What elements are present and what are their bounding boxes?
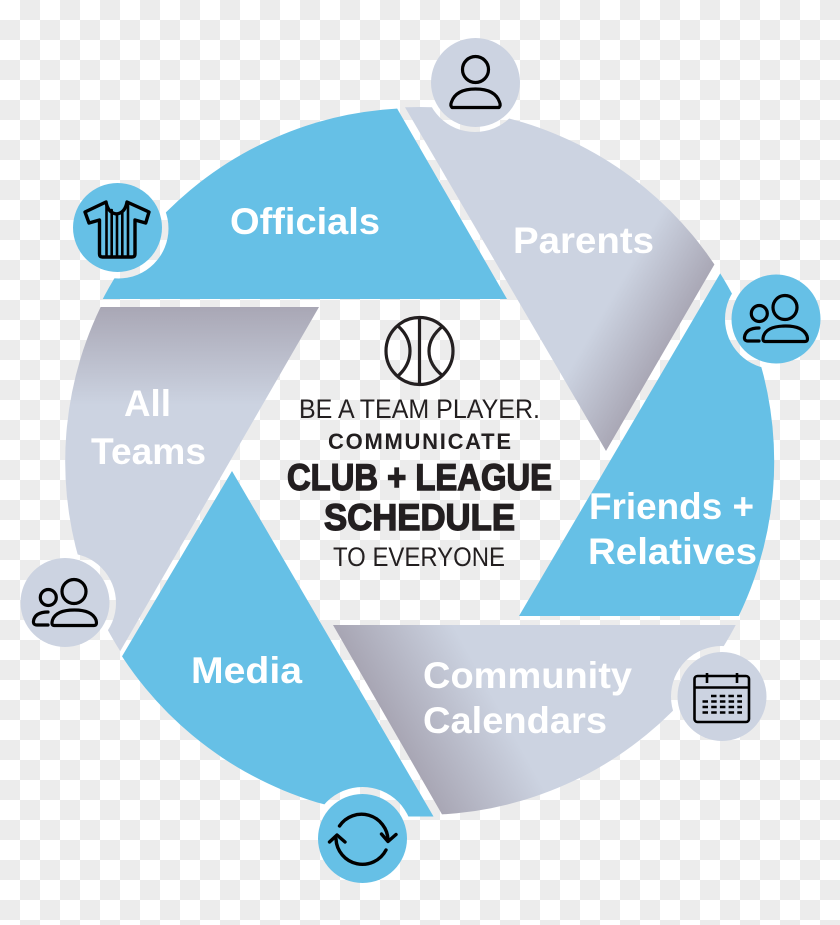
icon: referee jersey bbox=[73, 183, 162, 272]
panel: friends and relatives wedge bbox=[519, 273, 774, 616]
icon: basketball bbox=[386, 318, 453, 384]
icon: sync arrows bbox=[318, 794, 407, 883]
panel: all teams wedge bbox=[65, 307, 319, 651]
label: Friends + Relatives: Friends + bbox=[589, 486, 754, 527]
label: Friends + Relatives bbox=[588, 486, 757, 572]
label: Community Calendars: Calendars bbox=[423, 700, 607, 741]
icon: calendar bbox=[678, 652, 766, 741]
label: Community Calendars: Community bbox=[423, 655, 632, 696]
label: Media: Media bbox=[191, 650, 302, 691]
text: to everyone: TO EVERYONE bbox=[333, 542, 505, 572]
icon: all teams group bbox=[20, 558, 110, 647]
panel: parents wedge bbox=[405, 107, 714, 451]
text: communicate: COMMUNICATE bbox=[328, 429, 511, 454]
label: All Teams bbox=[91, 383, 206, 472]
label: Officials: Officials bbox=[230, 201, 380, 242]
label: Parents: Parents bbox=[513, 220, 654, 261]
icon: parent person bbox=[431, 38, 520, 127]
label: Community Calendars bbox=[423, 655, 632, 741]
label: All Teams: Teams bbox=[91, 431, 206, 472]
text: be a team player: BE A TEAM PLAYER. bbox=[299, 394, 540, 424]
text: schedule: SCHEDULE bbox=[324, 497, 515, 538]
label: Friends + Relatives: Relatives bbox=[588, 531, 757, 572]
cycle ring of wedges bbox=[65, 107, 774, 816]
icon: friends group bbox=[732, 274, 820, 364]
text: club + league: CLUB + LEAGUE bbox=[287, 457, 552, 498]
panel: media wedge bbox=[122, 471, 434, 816]
center message bbox=[287, 394, 552, 572]
panel: community calendars wedge bbox=[333, 625, 736, 814]
panel: officials wedge bbox=[102, 108, 507, 299]
label: All Teams: All bbox=[124, 383, 171, 424]
